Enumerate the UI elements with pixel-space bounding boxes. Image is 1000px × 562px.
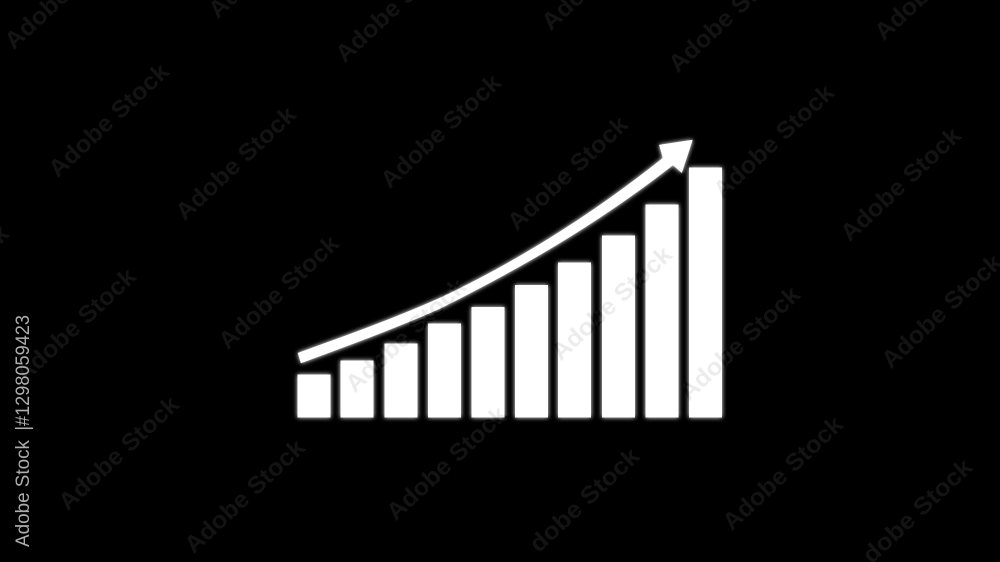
bar 8 <box>602 236 635 418</box>
watermark pattern: Adobe Stock <box>717 411 849 536</box>
bar 5 <box>472 307 504 418</box>
watermark pattern: Adobe Stock <box>170 101 302 226</box>
watermark pattern: Adobe Stock <box>546 241 678 366</box>
watermark pattern: Adobe Stock <box>708 79 840 204</box>
vertical stock credit label: | <box>13 420 34 436</box>
watermark pattern: Adobe Stock <box>876 249 1000 374</box>
bar 4 <box>428 324 461 418</box>
watermark pattern: Adobe Stock <box>674 281 806 406</box>
bar chart <box>298 168 722 418</box>
watermark pattern: Adobe Stock <box>43 58 175 183</box>
watermark pattern: Adobe Stock <box>10 263 142 388</box>
watermark pattern: Adobe Stock <box>340 273 472 398</box>
bar 9 <box>646 204 678 418</box>
bar 10 <box>689 168 722 418</box>
bar 3 <box>384 344 418 418</box>
watermark pattern: Adobe Stock <box>375 69 507 194</box>
bar 1 <box>298 374 330 418</box>
vertical stock credit label: #1298059423 <box>13 315 34 426</box>
watermark pattern: Adobe Stock <box>53 391 185 516</box>
bar 6 <box>515 285 548 418</box>
watermark pattern: dobe Stock <box>524 442 646 558</box>
watermark pattern: Adobe Stock <box>381 401 513 526</box>
watermark pattern: Adobe Stock <box>213 230 345 355</box>
vertical stock credit label: Adobe Stock <box>13 440 34 547</box>
bar 2 <box>340 360 374 418</box>
arrow: rising growth curve <box>298 140 692 363</box>
watermark pattern: Adobe Stock <box>835 122 967 247</box>
watermark pattern: Adobe Stock <box>502 111 634 236</box>
bar 7 <box>558 262 591 418</box>
watermark pattern: Adobe Stock <box>179 434 311 559</box>
